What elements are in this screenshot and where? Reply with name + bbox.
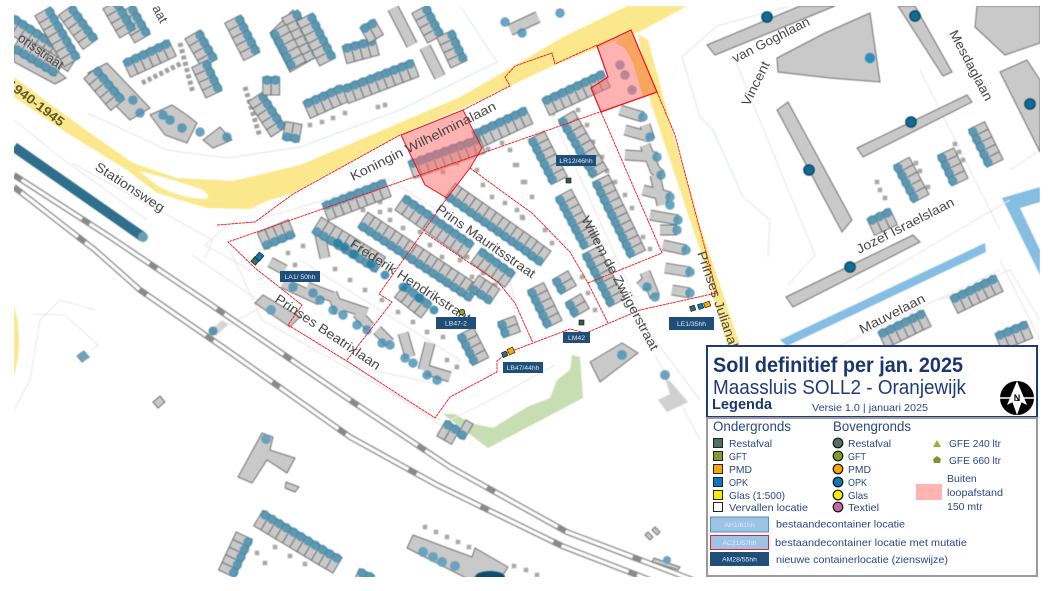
legend header panel: [707, 346, 1037, 417]
walking distance legend: Buiten: [947, 473, 977, 485]
location type legend: bestaandecontainer locatie: [776, 518, 905, 530]
water: right canal: [1002, 187, 1040, 275]
version: Versie 1.0 | januari 2025: [812, 402, 928, 414]
GFE legend: GFE 660 ltr: [949, 455, 1001, 467]
walking-distance boundary: [591, 30, 657, 112]
location labels: [280, 155, 714, 373]
underground legend: Vervallen locatie: [729, 502, 808, 514]
pink zone: Koningin Wilhelminalaan: [401, 110, 482, 198]
location labels: LR12/46hh: [559, 158, 593, 165]
road labels: Koningin Wilhelminalaan: [348, 98, 498, 184]
road labels: Prinses Beatrixlaan: [272, 291, 384, 373]
garages: [257, 105, 963, 575]
overground legend: Textiel: [848, 502, 879, 514]
overground legend: PMD: [848, 464, 871, 476]
street outlines: [14, 60, 1040, 440]
underground legend: Restafval: [729, 438, 772, 450]
road labels: Prinses Julianalaan: [694, 249, 749, 372]
walking distance legend: [916, 473, 1003, 513]
red route lines: [217, 45, 717, 418]
road labels: Prins Mauritsstraat: [433, 201, 539, 281]
walking distance legend: 150 mtr: [947, 501, 983, 513]
stepped building blocks: [14, 10, 320, 148]
icon: north arrow: N: [1014, 393, 1020, 403]
irregular houses: [270, 110, 690, 377]
long dark row: [14, 147, 143, 237]
location type legend: [710, 517, 967, 566]
overground legend: GFT: [848, 451, 866, 463]
underground legend: GFT: [729, 451, 747, 463]
subtitle: Maassluis SOLL2 - Oranjewijk: [713, 377, 967, 399]
road labels: Mesdaglaan: [946, 27, 996, 103]
road: Prinses Julianalaan: [638, 34, 740, 345]
road labels: Stationsweg: [92, 159, 168, 215]
location labels: LE1/35hh: [677, 321, 706, 328]
heading: Ondergronds: Ondergronds: [713, 419, 791, 434]
road labels: Willem de Zwijgerstraat: [578, 213, 662, 353]
end of dark row circle: [138, 232, 148, 242]
orange overlap on road: [615, 30, 657, 97]
road island: [139, 171, 208, 199]
plain house rows: [393, 8, 538, 77]
green park: [443, 355, 583, 448]
underground legend: Glas (1:500): [729, 490, 785, 502]
location type legend: AC21/57hh: [722, 540, 757, 547]
container icons: [251, 178, 711, 358]
underground legend: OPK: [729, 477, 748, 489]
road labels: Jozef Israelslaan: [854, 194, 957, 257]
road labels: orisstraat: [15, 30, 67, 72]
overground legend: OPK: [848, 477, 867, 489]
overground legend: Restafval: [848, 438, 891, 450]
location type legend: AM28/55hh: [722, 556, 757, 564]
location type legend: bestaandecontainer locatie met mutatie: [775, 537, 967, 549]
road labels: [4, 2, 996, 373]
road labels: Frederik Hendrikstraat: [347, 236, 474, 326]
road labels: Vincent: [738, 58, 773, 108]
location labels: LM42: [568, 335, 585, 342]
road labels: van Goghlaan: [730, 14, 812, 66]
darker circles on Frederik Hendrikstraat: [338, 243, 434, 310]
road labels: aat: [149, 2, 171, 26]
legend body panel: [707, 418, 1037, 576]
garage strings: [142, 43, 260, 137]
road: Koningin Wilhelminalaan: [14, 6, 687, 209]
walking distance legend: loopafstand: [947, 487, 1003, 499]
overground legend: Glas: [848, 490, 868, 502]
title: Soll definitief per jan. 2025: [713, 354, 963, 377]
road: left edge: [14, 305, 19, 377]
underground legend: [714, 438, 808, 514]
overground legend: [833, 438, 891, 514]
water: canal strip: [780, 243, 986, 346]
location labels: LA1/ 50hh: [284, 274, 316, 281]
GFE legend: GFE 240 ltr: [949, 438, 1001, 450]
road labels: 1940-1945: [4, 76, 68, 129]
location labels: LB47-2: [445, 320, 467, 328]
icon: north arrow: [1000, 381, 1034, 415]
GFE legend: [933, 438, 1001, 467]
legend heading: Legenda: [712, 396, 773, 413]
cluster circles: [133, 13, 690, 380]
pink zone: Prinses Julianalaan: [592, 32, 643, 111]
road labels: Mauvelaan: [857, 291, 928, 337]
rail tracks: [14, 175, 693, 580]
thin waterways: [88, 6, 790, 257]
underground legend: PMD: [729, 464, 752, 476]
location labels: LB47/44hh: [507, 365, 540, 372]
location type legend: nieuwe containerlocatie (zienswijze): [776, 554, 948, 566]
heading: Bovengronds: Bovengronds: [833, 419, 911, 434]
location type legend: AH1/61hh: [724, 522, 755, 529]
